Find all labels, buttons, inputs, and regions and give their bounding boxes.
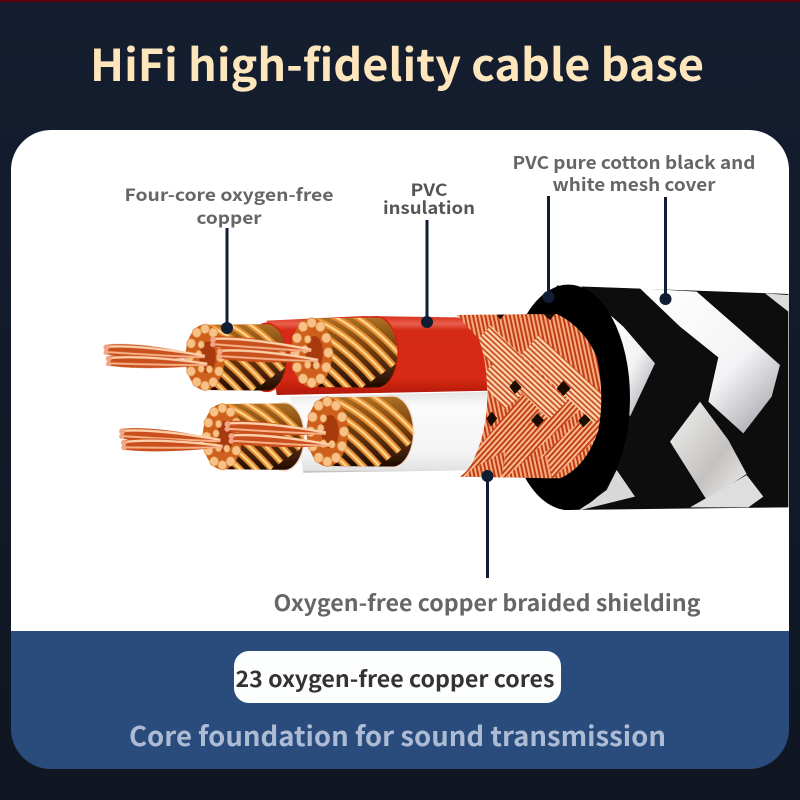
label: mesh cover: PVC pure cotton black and bbox=[512, 150, 756, 175]
leader: braided shielding bbox=[482, 470, 494, 578]
copper bundle: top right bbox=[222, 299, 403, 422]
card white area bbox=[11, 130, 789, 631]
jacket cut face bbox=[507, 285, 630, 510]
footer background bbox=[11, 631, 789, 769]
leader: PVC insulation bbox=[421, 220, 433, 328]
label: four-core copper: copper bbox=[196, 204, 262, 229]
panel: blue footer bbox=[11, 631, 789, 769]
red insulation bbox=[267, 316, 493, 395]
copper bundle: bottom right bbox=[237, 378, 419, 501]
title: HiFi high-fidelity cable base bbox=[90, 30, 704, 94]
silver mesh strands bbox=[570, 286, 788, 511]
leader: four-core copper bbox=[221, 228, 233, 334]
copper bundle: top left bbox=[119, 307, 292, 423]
black jacket bbox=[557, 286, 788, 510]
label: braided shielding: Oxygen-free copper braided shielding bbox=[274, 586, 700, 618]
label: PVC insulation: insulation bbox=[383, 194, 475, 219]
white insulation bbox=[290, 392, 493, 473]
copper bundle: bottom left bbox=[137, 386, 309, 502]
label: four-core copper bbox=[124, 181, 334, 229]
panel: cable card bbox=[11, 130, 789, 631]
label: mesh cover: white mesh cover bbox=[552, 172, 716, 197]
pill: copper cores: 23 oxygen-free copper cores bbox=[236, 662, 555, 694]
leader: cut face bbox=[542, 196, 554, 303]
stranded wire tips bbox=[103, 335, 332, 451]
tagline: Core foundation for sound transmission bbox=[129, 715, 666, 754]
top accent strip bbox=[0, 0, 800, 2]
label: PVC insulation: PVC bbox=[410, 176, 448, 201]
copper braided shield bbox=[456, 314, 602, 478]
leader: mesh cover bbox=[660, 197, 672, 305]
illustration: braided jacket bbox=[450, 285, 788, 511]
label: PVC insulation bbox=[383, 176, 475, 219]
label: mesh cover bbox=[512, 150, 756, 197]
illustration: exposed insulated conductors bbox=[103, 299, 493, 502]
label: four-core copper: Four-core oxygen-free bbox=[124, 181, 334, 206]
pill: copper cores bbox=[234, 651, 561, 703]
